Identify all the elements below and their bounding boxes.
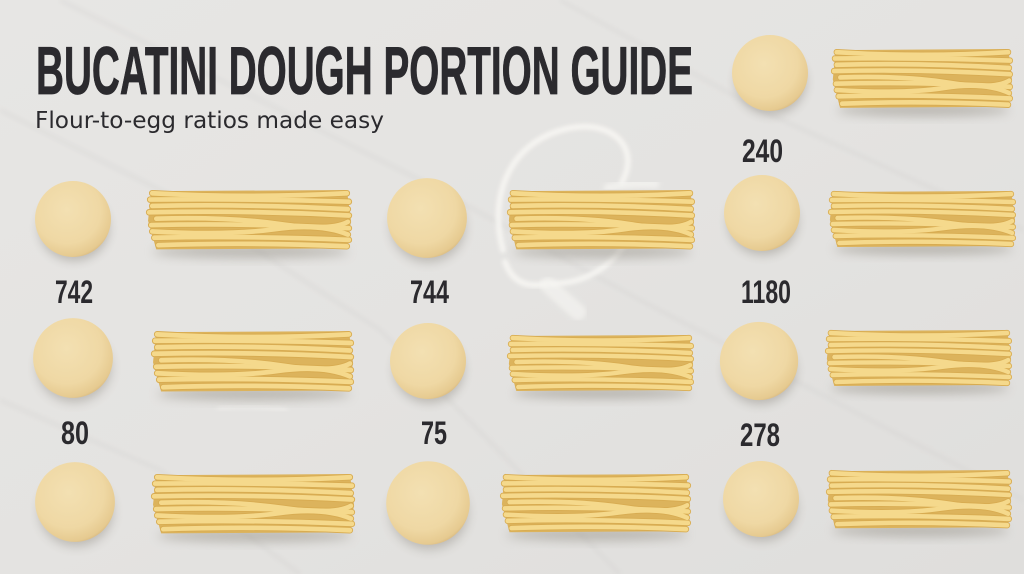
row 2 middle: dough ball (390, 323, 466, 403)
label 240: 240 (742, 133, 783, 169)
label 278: 278 (740, 417, 780, 453)
flour ring scatter (220, 127, 655, 410)
row 3 middle: dough ball (386, 461, 470, 549)
row 0 right: bucatini bundle (833, 49, 1012, 116)
row 3 middle: bucatini bundle (502, 474, 690, 541)
label 75: 75 (421, 415, 447, 451)
subtitle: Flour-to-egg ratios made easy (35, 108, 384, 134)
row 2 left: bucatini bundle (153, 331, 353, 400)
label 1180: 1180 (741, 274, 791, 310)
row 1 right: dough ball (724, 175, 800, 255)
row 2 right: dough ball (720, 322, 798, 404)
row 2 middle: bucatini bundle (509, 335, 693, 399)
row 3 left: dough ball (35, 462, 115, 546)
row 1 middle: dough ball (387, 178, 467, 262)
row 2 right: bucatini bundle (827, 330, 1011, 394)
label 80: 80 (61, 415, 89, 451)
label 742: 742 (55, 274, 93, 310)
row 1 left: dough ball (35, 181, 111, 261)
label 744: 744 (410, 274, 449, 310)
row 1 right: bucatini bundle (830, 191, 1015, 255)
row 3 right: dough ball (723, 461, 799, 541)
row 2 left: dough ball (33, 318, 113, 402)
row 3 left: bucatini bundle (153, 474, 354, 542)
row 1 left: bucatini bundle (148, 190, 351, 258)
row 1 middle: bucatini bundle (509, 190, 694, 258)
row 3 right: bucatini bundle (828, 470, 1011, 537)
row 0 right: dough ball (732, 35, 808, 115)
